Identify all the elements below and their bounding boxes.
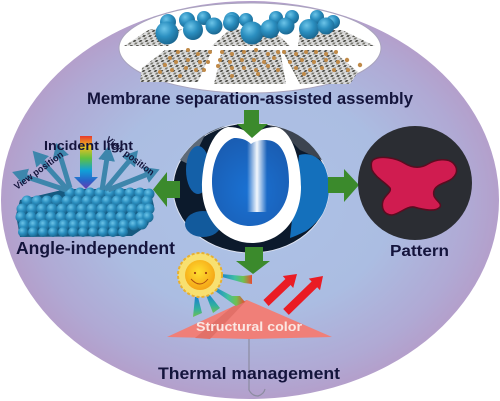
dark disc bbox=[358, 126, 472, 240]
white streak bbox=[247, 134, 267, 212]
sun body bbox=[178, 253, 222, 297]
red arrow 2 bbox=[283, 276, 323, 315]
orange particles bbox=[158, 48, 362, 78]
umbrella fold shading bbox=[195, 300, 247, 339]
view position label left: View position bbox=[12, 149, 66, 192]
blue spheres bbox=[156, 10, 340, 44]
nanosheets bbox=[124, 29, 375, 84]
arrow: left bbox=[153, 172, 180, 207]
structural color label: Structural color bbox=[196, 319, 302, 334]
panel: thermal management bbox=[167, 253, 332, 396]
umbrella handle bbox=[249, 338, 265, 396]
view position arrows bbox=[24, 155, 148, 190]
sphere film bbox=[16, 188, 154, 237]
grey upper corners bbox=[180, 126, 225, 165]
blue gloves bbox=[186, 146, 210, 194]
sun face bbox=[185, 260, 215, 290]
panel: pattern bbox=[358, 126, 472, 240]
white ellipse bbox=[119, 3, 381, 93]
heading: thermal management: Thermal management bbox=[158, 364, 340, 383]
arrow: top bbox=[237, 110, 268, 138]
arrow: bottom bbox=[236, 247, 270, 274]
umbrella canopy bbox=[167, 300, 332, 339]
heading: membrane separation: Membrane separation-assisted assembly bbox=[87, 90, 414, 108]
blue membrane bbox=[212, 138, 289, 226]
incident light label: Incident light bbox=[44, 139, 134, 153]
red arrow 1 bbox=[263, 274, 297, 306]
incident light rainbow arrow bbox=[74, 136, 98, 189]
butterfly bbox=[371, 157, 457, 215]
panel: central membrane photo bbox=[173, 123, 330, 253]
sun bbox=[178, 253, 252, 317]
arrow: right bbox=[328, 169, 359, 202]
sun rays rainbow bbox=[221, 274, 252, 284]
eyes and smile bbox=[194, 272, 196, 274]
white membrane ring bbox=[202, 127, 301, 243]
panel: angle-independent illustration bbox=[12, 135, 156, 237]
heading: angle-independent: Angle-independent bbox=[16, 238, 175, 258]
dark photo ellipse bbox=[173, 123, 329, 253]
panel: membrane separation illustration bbox=[119, 3, 381, 93]
view position label right: View position bbox=[103, 135, 156, 178]
heading: pattern: Pattern bbox=[390, 243, 449, 260]
